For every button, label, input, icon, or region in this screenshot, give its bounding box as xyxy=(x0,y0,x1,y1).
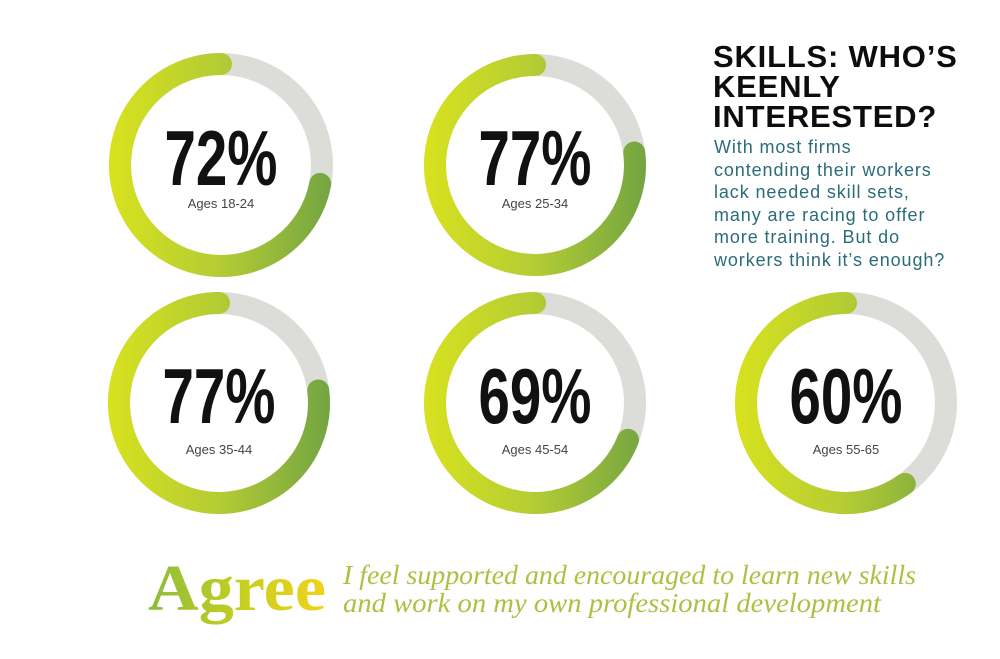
donut: 77% ages 35-44: Ages 35-44 xyxy=(186,442,252,457)
donut: 69% ages 45-54 xyxy=(435,303,635,503)
agree statement: I feel supported and encouraged to learn new skills xyxy=(342,560,916,590)
intro text: contending their workers xyxy=(714,160,932,180)
donut: 60% ages 55-65: 60% xyxy=(790,352,902,440)
donut: 72% ages 18-24: 72% xyxy=(164,114,278,202)
intro text: workers think it’s enough? xyxy=(714,250,945,270)
intro text: many are racing to offer xyxy=(714,205,925,225)
donut: 69% ages 45-54: Ages 45-54 xyxy=(502,442,568,457)
title: KEENLY xyxy=(713,69,841,104)
title: INTERESTED? xyxy=(713,99,937,134)
intro text: With most firms xyxy=(714,137,852,157)
donut: 60% ages 55-65 xyxy=(746,303,946,503)
intro text: lack needed skill sets, xyxy=(714,182,910,202)
agree statement: and work on my own professional development xyxy=(343,588,883,618)
intro text: more training. But do xyxy=(714,227,900,247)
donut: 77% ages 35-44: 77% xyxy=(162,352,276,440)
donut: 77% ages 25-34 xyxy=(435,65,635,265)
donut: 72% ages 18-24 xyxy=(120,64,322,266)
donut: 77% ages 25-34: Ages 25-34 xyxy=(502,196,568,211)
donut: 72% ages 18-24: Ages 18-24 xyxy=(188,196,254,211)
donut: 77% ages 35-44 xyxy=(119,303,319,503)
donut: 77% ages 25-34: 77% xyxy=(478,114,592,202)
donut: 60% ages 55-65: Ages 55-65 xyxy=(813,442,879,457)
title xyxy=(713,39,958,134)
title: SKILLS: WHO’S xyxy=(713,39,958,74)
agree statement xyxy=(342,560,916,618)
intro text xyxy=(714,137,945,270)
Agree heading: Agree xyxy=(148,552,326,625)
donut: 69% ages 45-54: 69% xyxy=(478,352,592,440)
